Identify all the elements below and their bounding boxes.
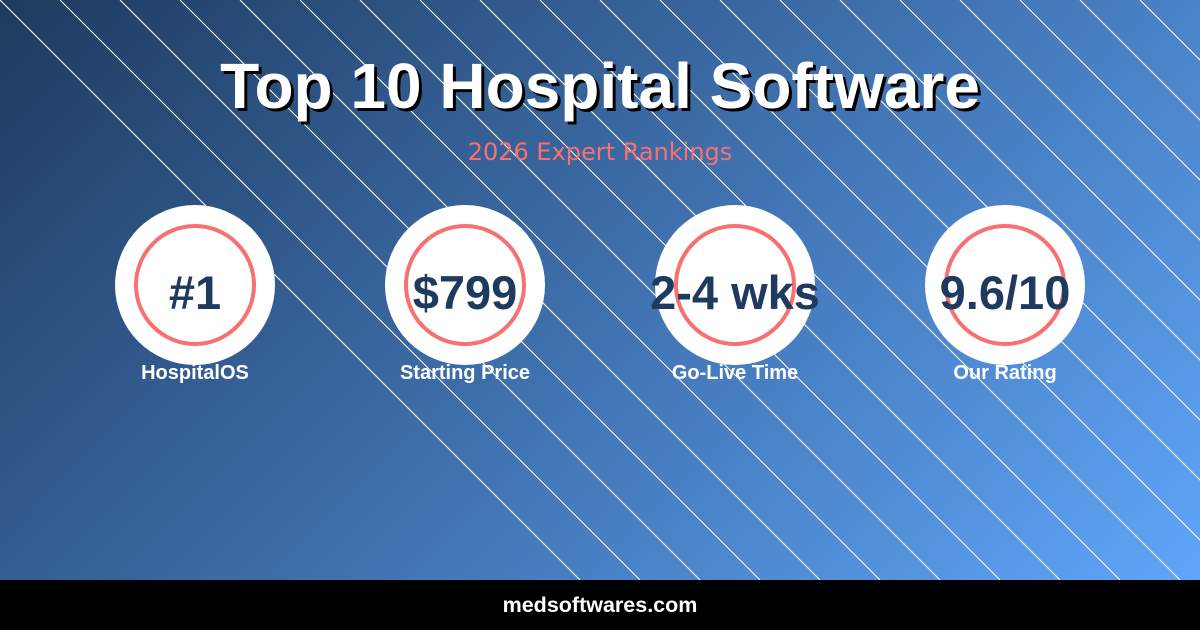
subtitle: 2026 Expert Rankings	[468, 138, 732, 166]
footer: medsoftwares.com	[503, 593, 697, 617]
title: Top 10 Hospital Software	[220, 50, 980, 122]
stat: rating: Our Rating	[953, 362, 1057, 384]
stat: rank	[115, 205, 275, 384]
stat: rank: HospitalOS	[141, 362, 249, 384]
stat: rating: 9.6/10	[940, 266, 1070, 319]
stat: go-live: 2-4 wks	[650, 266, 820, 319]
stat: price	[385, 205, 545, 384]
stat: rating	[925, 205, 1085, 384]
stat: rank: #1	[169, 266, 221, 319]
stat: price: Starting Price	[400, 362, 530, 384]
stat: go-live: Go-Live Time	[672, 362, 798, 384]
stat: go-live	[650, 205, 820, 384]
stat: price: $799	[413, 266, 517, 319]
footer	[0, 580, 1200, 630]
